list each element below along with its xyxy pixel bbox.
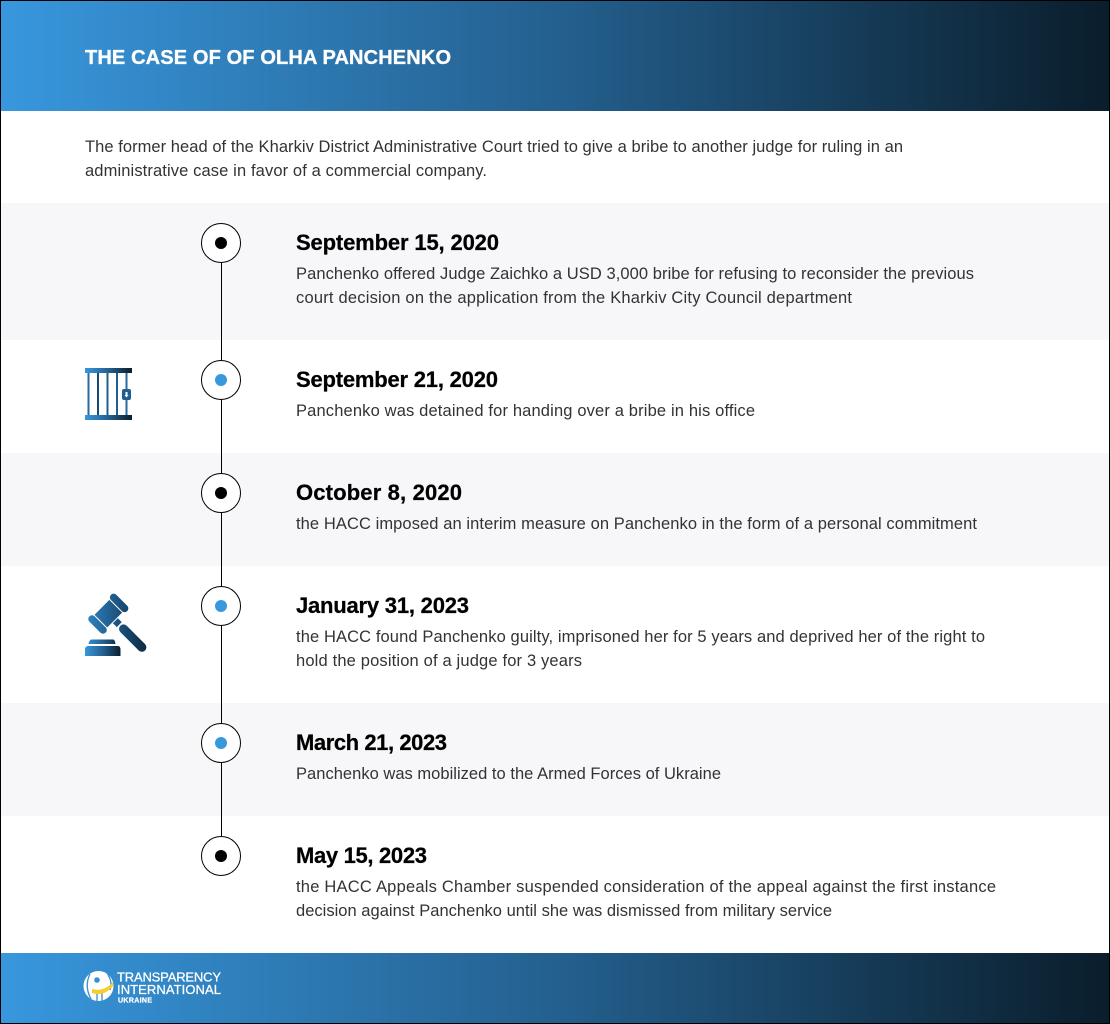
date: May 15, 2023: [296, 843, 427, 868]
description: Panchenko offered Judge Zaichko a USD 3,000 bribe for refusing to reconsider the previous: [296, 265, 974, 283]
entry: September 15, 2020: [202, 224, 974, 307]
date: September 15, 2020: [296, 230, 499, 255]
icon: jail bars: [85, 368, 132, 420]
row backgrounds: [1, 203, 1109, 816]
description: [296, 265, 974, 307]
logo text: TRANSPARENCY: [117, 970, 221, 984]
logo: Transparency International Ukraine: [84, 970, 221, 1004]
description: the HACC imposed an interim measure on Panchenko in the form of a personal commitment: [296, 515, 977, 533]
description: [296, 878, 996, 920]
logo text: INTERNATIONAL: [117, 982, 221, 997]
entry: March 21, 2023: [202, 724, 721, 783]
marker: black dot: [202, 836, 240, 876]
marker: black dot: [202, 224, 240, 262]
icon: gavel: [85, 594, 146, 656]
description: the HACC found Panchenko guilty, imprisoned her for 5 years and deprived her of the right to: [296, 628, 985, 646]
marker: blue dot: [202, 586, 240, 626]
description: decision against Panchenko until she was dismissed from military service: [296, 902, 832, 920]
description: hold the position of a judge for 3 years: [296, 652, 582, 670]
marker: blue dot: [202, 724, 240, 762]
description: the HACC Appeals Chamber suspended consideration of the appeal against the first instance: [296, 878, 996, 896]
timeline line: [220, 243, 222, 856]
entry: May 15, 2023: [202, 836, 996, 920]
description: court decision on the application from the Kharkiv City Council department: [296, 289, 852, 307]
entry: September 21, 2020: [202, 360, 755, 420]
footer banner: [1, 953, 1109, 1023]
date: September 21, 2020: [296, 367, 498, 392]
intro text: The former head of the Kharkiv District Administrative Court tried to give a bribe to another judge for ruling in an: [85, 138, 903, 156]
entry: October 8, 2020: [202, 474, 977, 533]
intro text: administrative case in favor of a commercial company.: [85, 162, 487, 180]
date: March 21, 2023: [296, 730, 447, 755]
header banner: [1, 1, 1109, 111]
logo mark: [84, 971, 114, 1001]
intro text: [85, 138, 903, 180]
date: October 8, 2020: [296, 480, 462, 505]
entry: January 31, 2023: [202, 586, 985, 670]
marker: black dot: [202, 474, 240, 512]
logo text: UKRAINE: [118, 998, 152, 1004]
description: [296, 628, 985, 670]
date: January 31, 2023: [296, 593, 469, 618]
description: Panchenko was detained for handing over a bribe in his office: [296, 402, 755, 420]
title: THE CASE OF OF OLHA PANCHENKO: [85, 47, 451, 69]
logo text: [117, 970, 221, 1004]
marker: blue dot: [202, 360, 240, 400]
description: Panchenko was mobilized to the Armed Forces of Ukraine: [296, 765, 721, 783]
